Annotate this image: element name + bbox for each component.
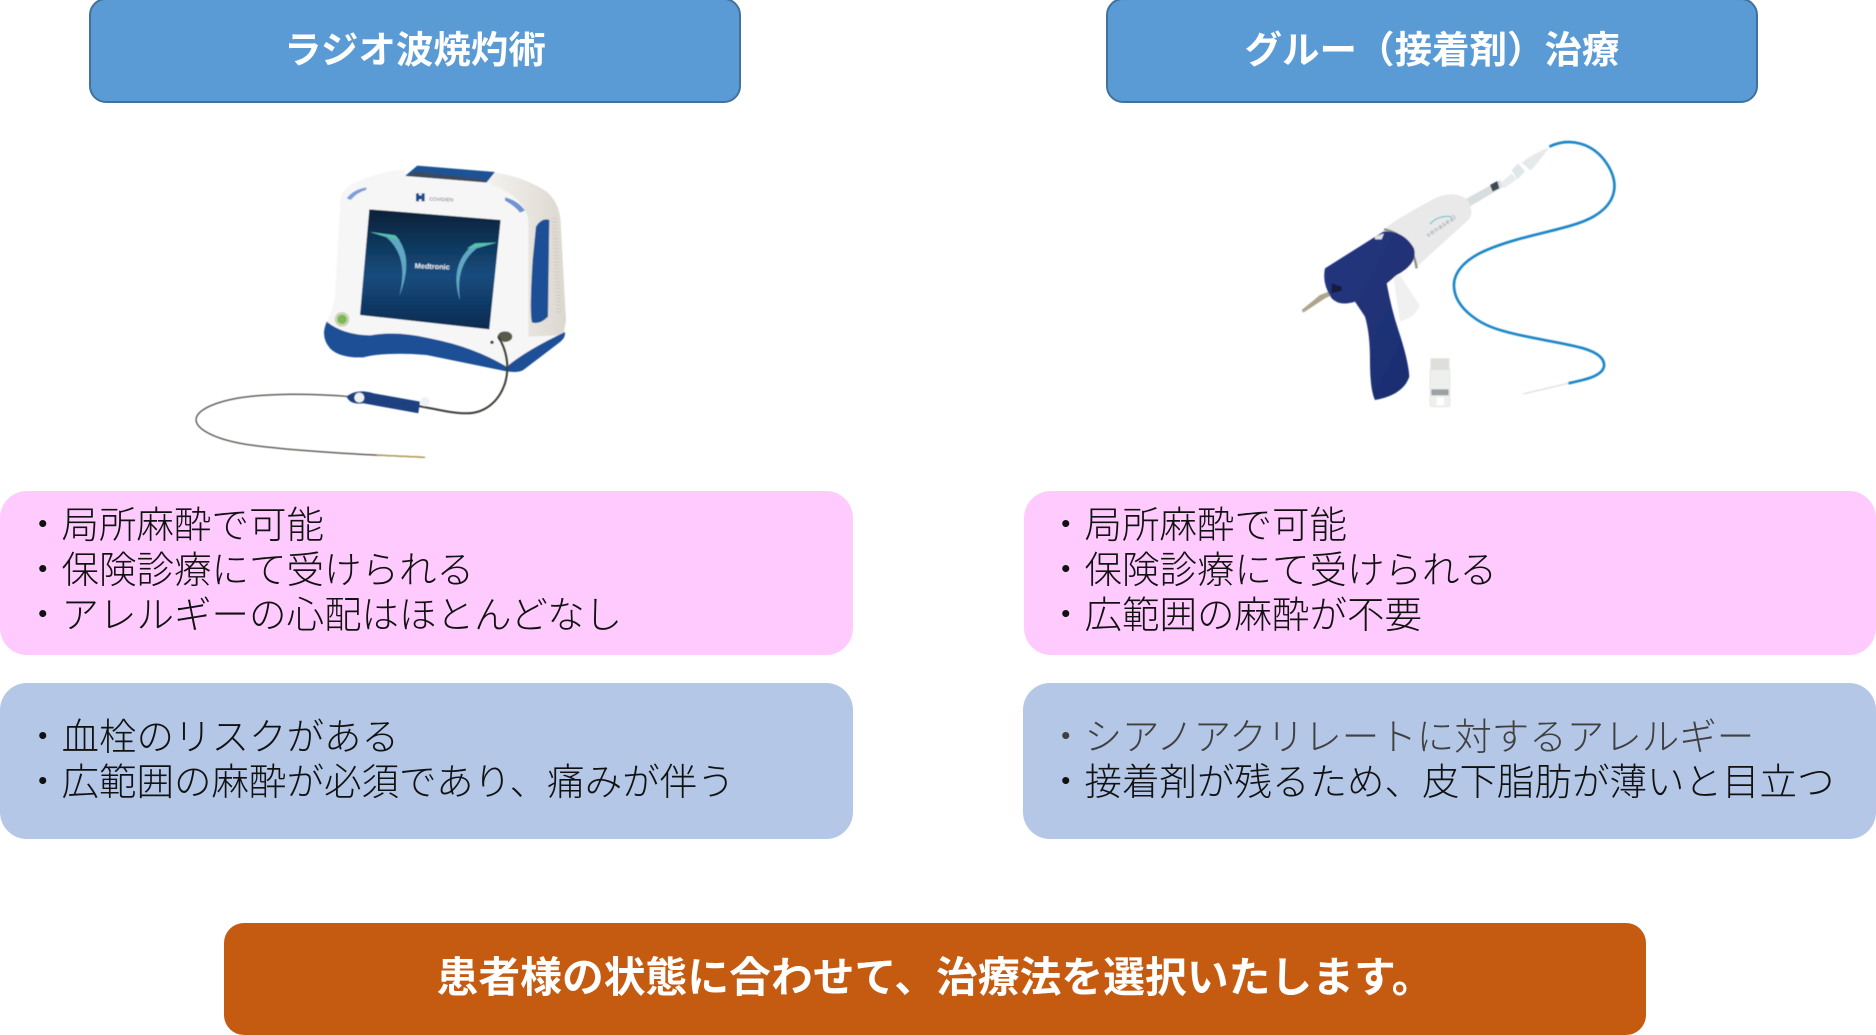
text: RF benefits list: ・アレルギーの心配はほとんどなし <box>24 594 622 636</box>
text: RF drawbacks list: ・広範囲の麻酔が必須であり、痛みが伴う <box>24 760 735 802</box>
corner accents <box>347 187 367 200</box>
heading: glue treatment: グルー（接着剤）治療 <box>1244 29 1620 71</box>
text: glue benefits list: ・広範囲の麻酔が不要 <box>1047 594 1422 636</box>
text: glue drawbacks list: ・接着剤が残るため、皮下脂肪が薄いと目立つ <box>1047 760 1834 802</box>
grip <box>347 391 420 413</box>
cable <box>418 337 507 413</box>
handle <box>405 166 495 183</box>
power button <box>335 312 349 327</box>
venaseal logo: venaseal <box>1426 214 1458 239</box>
vent <box>554 218 559 313</box>
illustration: radiofrequency generator with catheter <box>194 164 566 459</box>
illustration: glue injection gun with catheter and vial <box>1301 140 1617 408</box>
catheter tip <box>1523 383 1568 394</box>
text: RF benefits list: ・局所麻酔で可能 <box>24 504 324 546</box>
blue base <box>324 322 565 372</box>
heading: radiofrequency ablation: ラジオ波焼灼術 <box>284 29 546 71</box>
nozzle rod <box>1302 287 1342 313</box>
panel: glue benefits <box>1024 491 1876 655</box>
text: RF benefits list <box>24 504 622 636</box>
heading: radiofrequency ablation <box>89 0 741 103</box>
trigger <box>1393 275 1419 322</box>
panel: glue drawbacks <box>1023 683 1876 839</box>
pistol body <box>1324 232 1415 400</box>
text: glue benefits list <box>1047 504 1497 636</box>
white cylinder <box>1385 194 1471 268</box>
text: glue benefits list: ・保険診療にて受けられる <box>1047 549 1497 591</box>
COVIDIEN logo <box>416 193 425 201</box>
text: glue drawbacks list <box>1047 716 1834 802</box>
callout: conclusion banner: 患者様の状態に合わせて、治療法を選択いたします。 <box>437 954 1433 1001</box>
screen <box>360 209 501 329</box>
text: RF drawbacks list <box>24 716 735 802</box>
text: RF benefits list: ・保険診療にて受けられる <box>24 549 474 591</box>
heading: glue treatment <box>1106 0 1758 103</box>
text: glue benefits list: ・局所麻酔で可能 <box>1047 504 1347 546</box>
text: RF drawbacks list: ・血栓のリスクがある <box>24 716 399 758</box>
syringe <box>1464 180 1503 207</box>
panel: RF benefits <box>0 491 853 655</box>
blue catheter <box>1454 142 1614 383</box>
illustration: radiofrequency generator with catheter: COVIDIEN <box>429 197 454 204</box>
side window <box>531 219 549 323</box>
vial <box>1430 368 1450 407</box>
catheter <box>196 394 425 457</box>
connector <box>498 331 512 342</box>
right side <box>487 173 566 337</box>
body shell <box>324 169 566 370</box>
callout: conclusion banner <box>224 923 1646 1035</box>
Medtronic label: Medtronic <box>415 261 450 272</box>
screen arcs <box>370 232 406 296</box>
panel: RF drawbacks <box>0 683 853 839</box>
text: glue drawbacks list: ・シアノアクリレートに対するアレルギー <box>1047 716 1754 758</box>
